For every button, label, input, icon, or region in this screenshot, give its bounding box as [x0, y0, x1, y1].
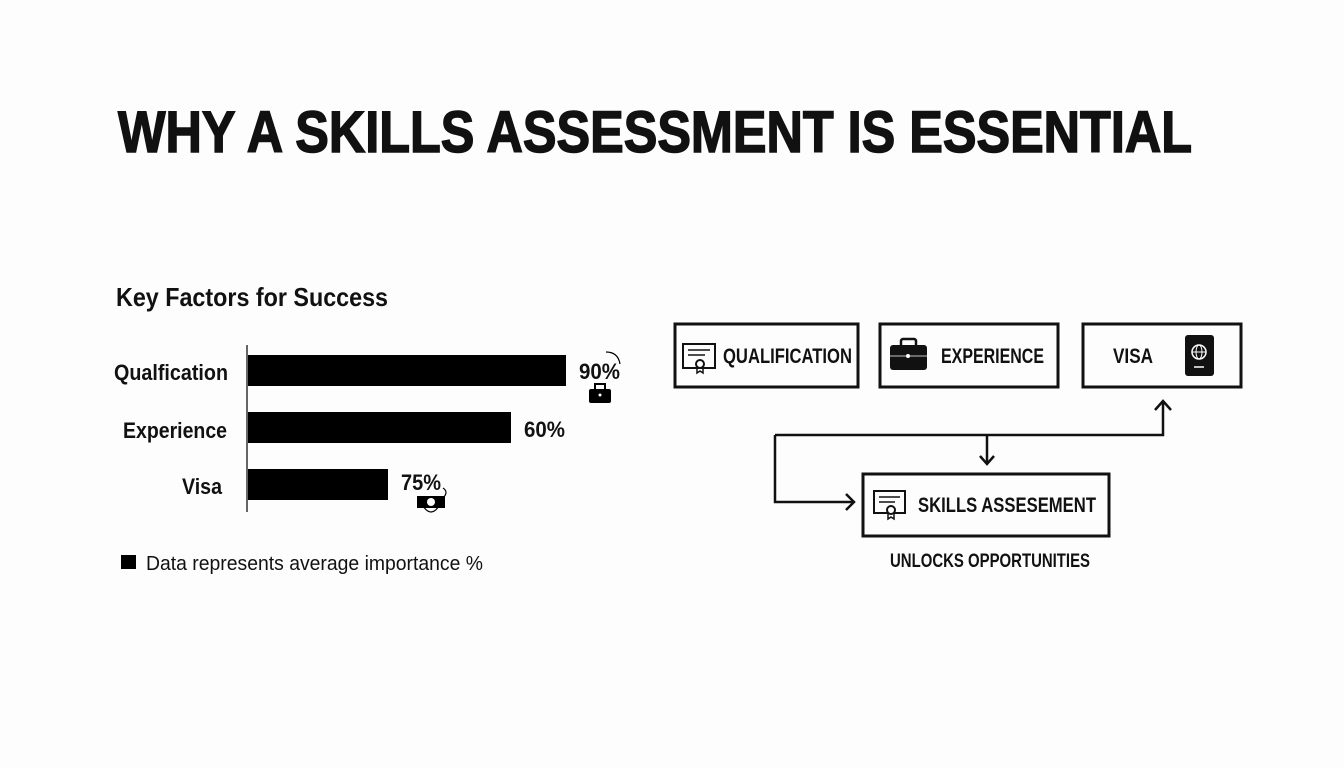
box: skills assessment: SKILLS ASSESEMENT [918, 494, 1096, 517]
bar: visa: Visa [182, 474, 223, 499]
icon: certificate [683, 344, 715, 373]
panel: flow diagram [675, 324, 1241, 572]
bar: qualification: 90% [579, 359, 620, 384]
bar: visa: 75% [401, 470, 441, 495]
box: visa [1083, 324, 1241, 387]
bar: experience: 60% [524, 417, 565, 442]
icon: briefcase [890, 339, 927, 370]
bar: qualification [114, 355, 620, 386]
bar: qualification: Qualfication [114, 360, 228, 385]
box: skills assessment [863, 474, 1109, 536]
caption: unlocks opportunities: UNLOCKS OPPORTUNITIES [890, 551, 1090, 572]
icon: passport [1185, 335, 1214, 376]
arrows: connector [775, 401, 1171, 510]
box: qualification: QUALIFICATION [723, 345, 852, 368]
chart heading: Key Factors for Success [116, 282, 388, 312]
box: visa: VISA [1113, 345, 1153, 368]
panel: bar chart [114, 282, 620, 575]
bar: experience [123, 412, 565, 443]
legend: Data represents average importance % [146, 553, 483, 575]
axis [246, 345, 248, 512]
icon: briefcase small [589, 352, 620, 403]
box: qualification [675, 324, 858, 387]
box: experience: EXPERIENCE [941, 345, 1044, 368]
bar: experience: Experience [123, 418, 227, 443]
title: WHY A SKILLS ASSESSMENT IS ESSENTIAL [118, 100, 1192, 165]
box: experience [880, 324, 1058, 387]
bar: visa [182, 469, 441, 500]
icon: small badge [417, 488, 446, 512]
icon: certificate [874, 491, 905, 519]
